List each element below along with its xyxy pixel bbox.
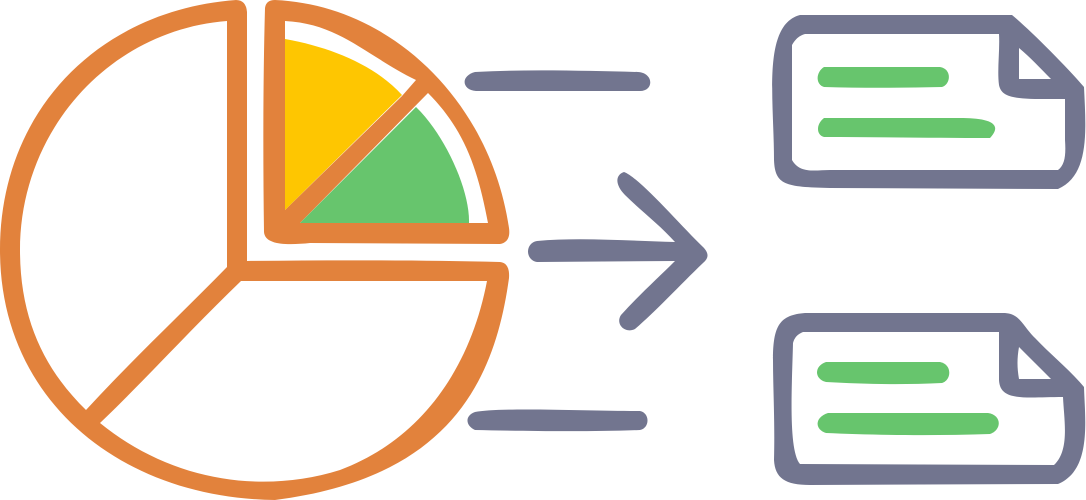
bottom document xyxy=(773,313,1085,485)
pulled-out slice outline xyxy=(263,0,509,244)
top document xyxy=(772,15,1085,189)
green text bar 2 xyxy=(818,413,999,435)
pie chart xyxy=(0,0,509,500)
green text bar 2 xyxy=(818,118,995,138)
top connector line xyxy=(465,70,650,91)
centre arrow xyxy=(528,172,708,330)
document outline xyxy=(773,313,1085,485)
bottom connector line xyxy=(467,409,648,431)
document outline xyxy=(772,15,1085,189)
yellow segment xyxy=(285,39,402,210)
green segment xyxy=(300,107,469,223)
pie body with left and bottom slices xyxy=(0,0,509,500)
green text bar 1 xyxy=(818,67,949,88)
green text bar 1 xyxy=(817,362,949,384)
